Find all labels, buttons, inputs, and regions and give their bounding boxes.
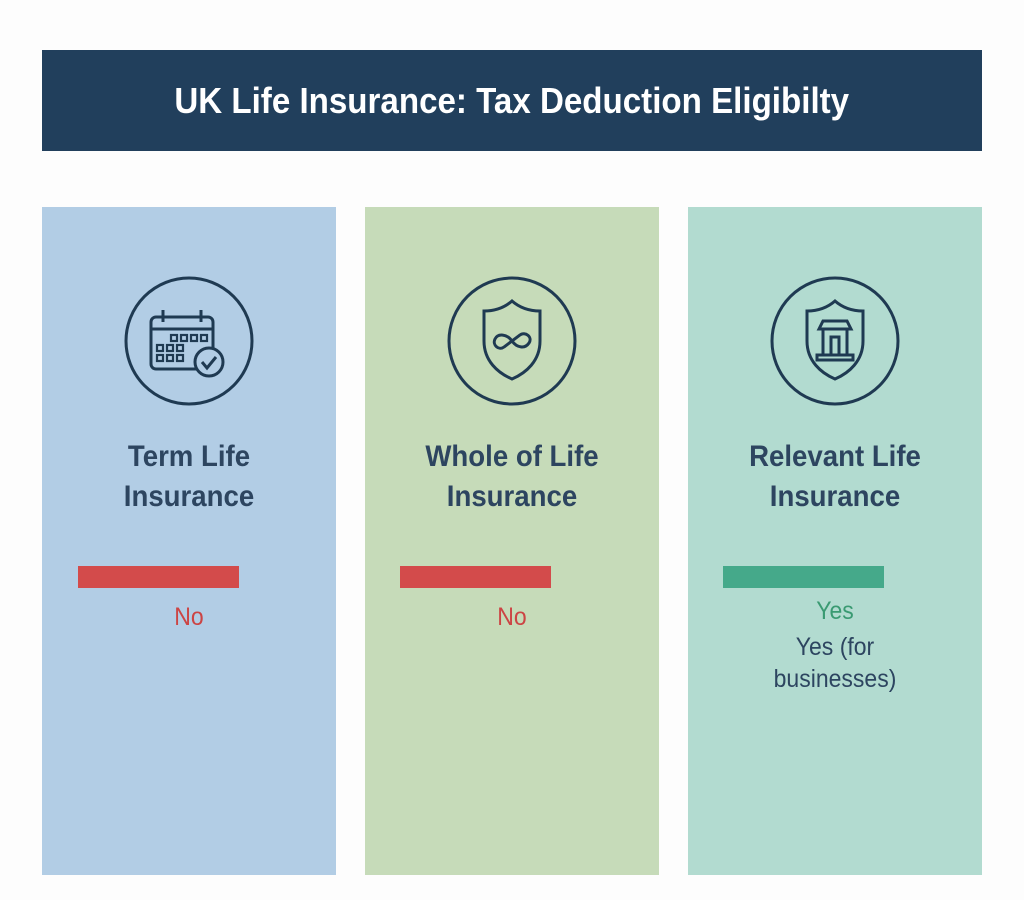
heading: Insurance	[770, 480, 900, 513]
heading: Term Life	[128, 440, 250, 473]
answer detail: Yes (for	[796, 633, 874, 661]
answer: No	[174, 603, 204, 631]
panel: term life	[42, 207, 336, 875]
heading: Whole of Life	[425, 440, 599, 473]
heading	[425, 440, 599, 513]
heading: Insurance	[447, 480, 577, 513]
title	[42, 50, 982, 151]
answer detail: businesses)	[774, 665, 896, 693]
bar: no	[400, 566, 551, 588]
panel: relevant life	[688, 207, 982, 875]
answer detail	[774, 633, 896, 693]
panel: whole of life	[365, 207, 659, 875]
answer: Yes	[816, 597, 854, 625]
icon: shield infinity	[448, 276, 576, 406]
icon: shield building	[770, 276, 900, 406]
heading: Insurance	[124, 480, 254, 513]
heading	[749, 440, 921, 513]
heading: Relevant Life	[749, 440, 921, 473]
answer: No	[497, 603, 527, 631]
bar: yes	[723, 566, 884, 588]
heading	[124, 440, 254, 513]
icon: calendar	[124, 276, 254, 406]
title: UK Life Insurance: Tax Deduction Eligibilty	[175, 80, 849, 120]
bar: no	[78, 566, 239, 588]
